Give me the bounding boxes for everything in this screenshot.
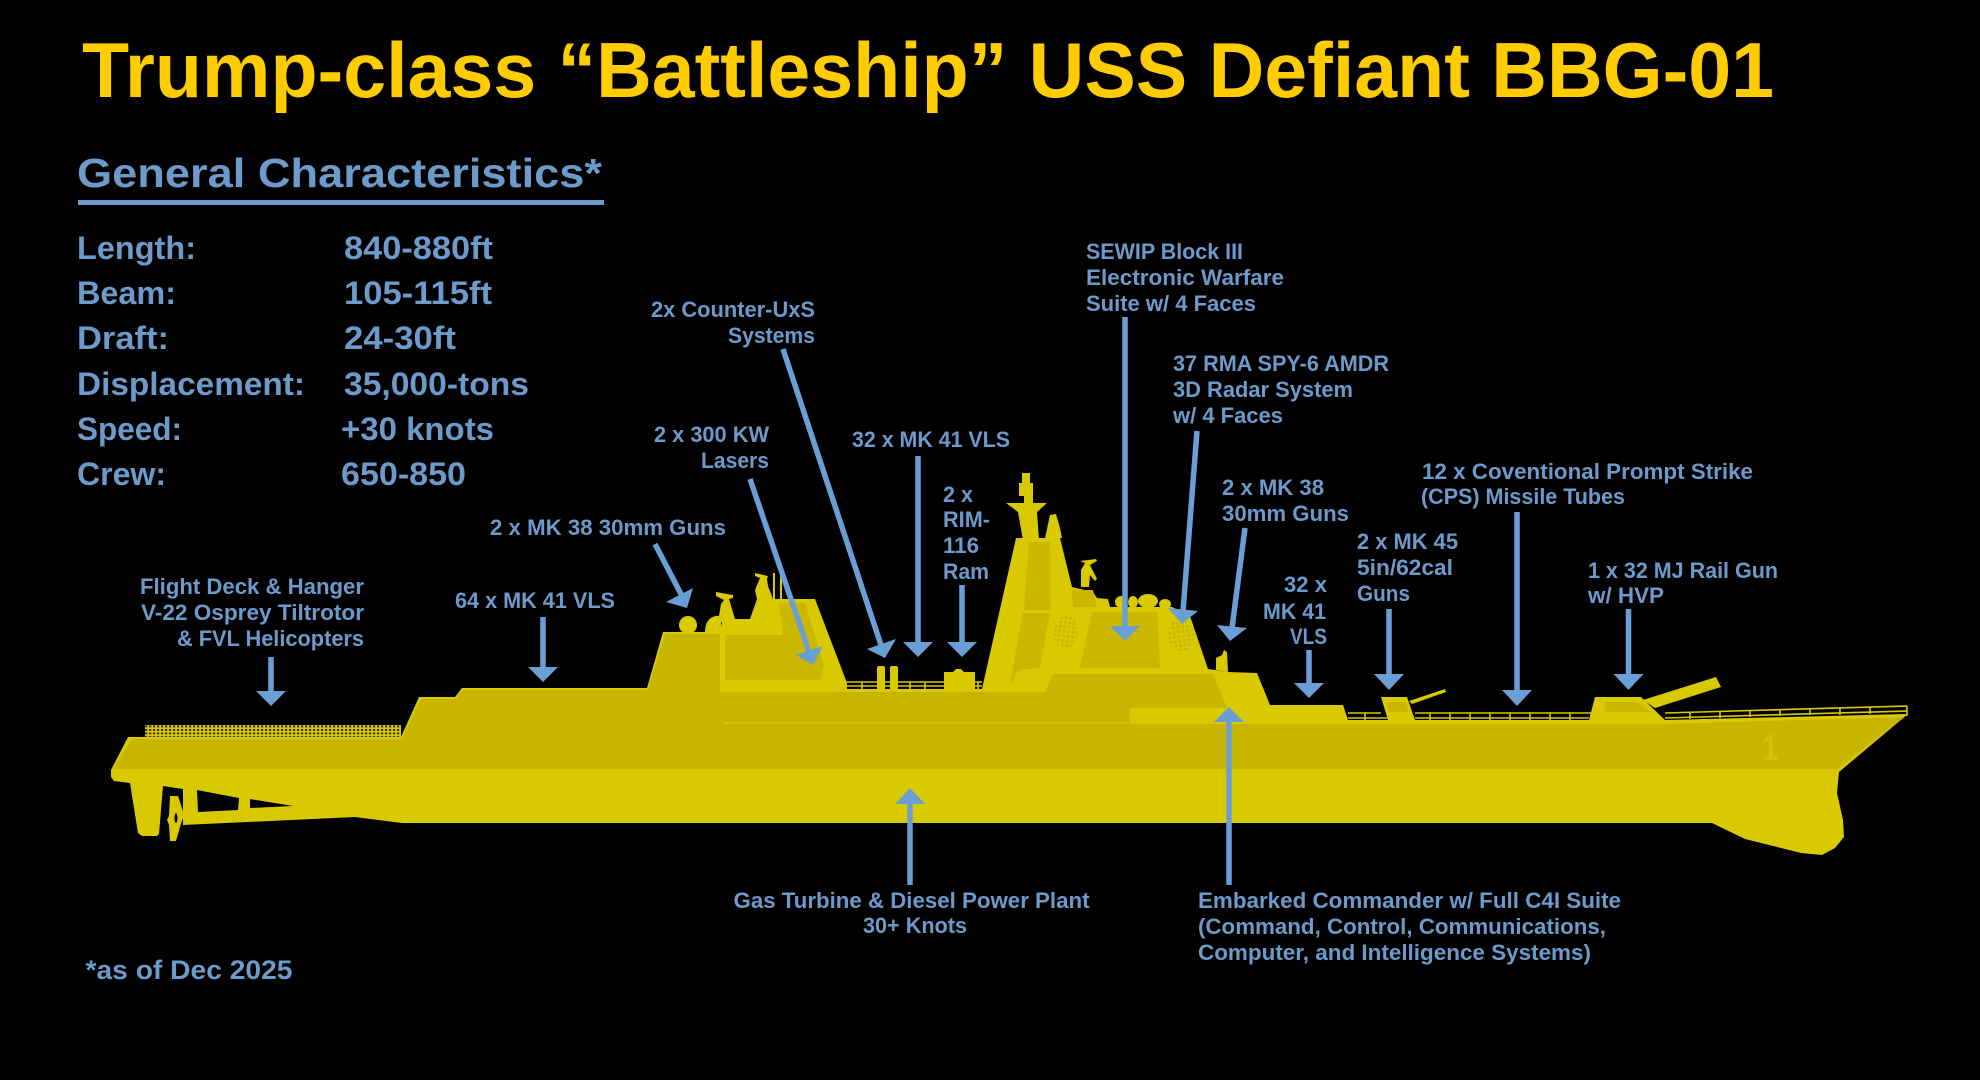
arrow: aft MK 38 guns bbox=[655, 544, 693, 608]
label: SEWIP: Electronic Warfare bbox=[1086, 265, 1284, 290]
label: forward MK 38 guns: 30mm Guns bbox=[1222, 501, 1349, 526]
arrow: RIM-116 Ram bbox=[947, 585, 977, 657]
label: lasers: Lasers bbox=[701, 448, 769, 473]
label: RIM-116 Ram bbox=[943, 482, 990, 584]
label: 32 x MK 41 VLS forward: VLS bbox=[1290, 624, 1327, 649]
label: lasers: 2 x 300 KW bbox=[654, 422, 769, 447]
railings bbox=[145, 682, 1907, 737]
arrow: counter-UxS bbox=[783, 349, 896, 658]
label: power plant bbox=[734, 888, 1090, 938]
arrow: flight deck bbox=[256, 657, 286, 706]
label: MK 45 guns: Guns bbox=[1357, 581, 1410, 606]
label: counter-UxS: Systems bbox=[728, 323, 815, 348]
stern windows bbox=[174, 790, 293, 823]
characteristics table: 24-30ft bbox=[344, 320, 456, 356]
label: 32 x MK 41 VLS forward bbox=[1263, 572, 1328, 649]
arrow: power plant bbox=[895, 788, 925, 885]
deck seam bbox=[723, 722, 1133, 724]
label: embarked commander: Computer, and Intelligence Systems) bbox=[1198, 940, 1591, 965]
arrow: 32 x MK 41 VLS forward bbox=[1294, 650, 1324, 698]
label: CPS missile tubes bbox=[1421, 459, 1753, 509]
propeller bbox=[167, 796, 184, 841]
label: rail gun: w/ HVP bbox=[1587, 583, 1664, 608]
label: forward MK 38 guns bbox=[1222, 475, 1349, 526]
gun mounts bbox=[1386, 677, 1721, 712]
hull base bbox=[111, 538, 1908, 855]
characteristics table: Draft: bbox=[77, 320, 169, 356]
arrow: lasers bbox=[750, 479, 823, 665]
aft light strip bbox=[720, 634, 725, 692]
label: 32 x MK 41 VLS midship: 32 x MK 41 VLS bbox=[852, 427, 1010, 452]
label: 64 x MK 41 VLS: 64 x MK 41 VLS bbox=[455, 588, 615, 613]
label: lasers bbox=[654, 422, 769, 473]
arrow: CPS missile tubes bbox=[1502, 512, 1532, 706]
dark hull band bbox=[113, 634, 1903, 769]
label: counter-UxS bbox=[651, 297, 815, 348]
label: CPS missile tubes: 12 x Coventional Prompt Strike bbox=[1422, 459, 1753, 484]
characteristics table: 650-850 bbox=[341, 456, 466, 492]
arrow: SPY-6 radar bbox=[1168, 431, 1198, 624]
laser mount bbox=[820, 670, 840, 682]
label: aft MK 38 guns: 2 x MK 38 30mm Guns bbox=[490, 515, 726, 540]
label: flight deck bbox=[140, 574, 364, 651]
label: RIM-116 Ram: 2 x bbox=[943, 482, 974, 507]
mast bbox=[1006, 473, 1228, 672]
label: rail gun bbox=[1587, 558, 1778, 608]
characteristics table: 105-115ft bbox=[344, 275, 492, 311]
label: SPY-6 radar: 3D Radar System bbox=[1173, 377, 1353, 402]
label: flight deck: V-22 Osprey Tiltrotor bbox=[141, 600, 364, 625]
label: 32 x MK 41 VLS forward: 32 x bbox=[1284, 572, 1328, 597]
title: Trump-class “Battleship” USS Defiant BBG-01 bbox=[82, 26, 1774, 114]
label: embarked commander: Embarked Commander w/ Full C4I Suite bbox=[1198, 888, 1621, 913]
characteristics table: Speed: bbox=[77, 411, 182, 447]
label: 32 x MK 41 VLS forward: MK 41 bbox=[1263, 599, 1326, 624]
label: power plant: Gas Turbine & Diesel Power Plant bbox=[734, 888, 1090, 913]
arrow: SEWIP bbox=[1110, 317, 1140, 641]
label: SEWIP: Suite w/ 4 Faces bbox=[1086, 291, 1256, 316]
radar faces bbox=[1052, 613, 1196, 653]
characteristics table bbox=[77, 230, 529, 492]
label: SPY-6 radar: w/ 4 Faces bbox=[1172, 403, 1283, 428]
label: embarked commander: (Command, Control, Communications, bbox=[1198, 914, 1606, 939]
arrow: MK 45 guns bbox=[1374, 609, 1404, 690]
label: rail gun: 1 x 32 MJ Rail Gun bbox=[1588, 558, 1778, 583]
label: MK 45 guns bbox=[1357, 529, 1458, 606]
characteristics table: 35,000-tons bbox=[344, 366, 529, 402]
label: MK 45 guns: 2 x MK 45 bbox=[1357, 529, 1458, 554]
label: CPS missile tubes: (CPS) Missile Tubes bbox=[1421, 484, 1625, 509]
characteristics table: Length: bbox=[77, 230, 196, 266]
label: flight deck: Flight Deck & Hanger bbox=[140, 574, 364, 599]
footnote: *as of Dec 2025 bbox=[86, 955, 292, 985]
arrow: 64 x MK 41 VLS bbox=[528, 617, 558, 682]
characteristics table: 840-880ft bbox=[344, 230, 493, 266]
label: RIM-116 Ram: RIM- bbox=[943, 507, 990, 532]
arrow: 32 x MK 41 VLS midship bbox=[903, 456, 933, 657]
label: flight deck: & FVL Helicopters bbox=[177, 626, 364, 651]
label: forward MK 38 guns: 2 x MK 38 bbox=[1222, 475, 1324, 500]
label: MK 45 guns: 5in/62cal bbox=[1357, 555, 1453, 580]
label: SPY-6 radar bbox=[1172, 351, 1389, 428]
label: counter-UxS: 2x Counter-UxS bbox=[651, 297, 815, 322]
label: SPY-6 radar: 37 RMA SPY-6 AMDR bbox=[1173, 351, 1389, 376]
label: power plant: 30+ Knots bbox=[863, 913, 967, 938]
label: RIM-116 Ram: Ram bbox=[943, 559, 989, 584]
hull number: 1 bbox=[1762, 727, 1778, 768]
arrow: embarked commander bbox=[1214, 707, 1244, 885]
aft superstructure panel bbox=[725, 603, 824, 680]
characteristics table: Beam: bbox=[77, 275, 176, 311]
ship silhouette bbox=[111, 473, 1908, 855]
label: SEWIP bbox=[1086, 239, 1284, 316]
arrow: forward MK 38 guns bbox=[1217, 528, 1247, 641]
characteristics table: Crew: bbox=[77, 456, 166, 492]
aft domes and guns bbox=[679, 573, 975, 691]
characteristics table: +30 knots bbox=[341, 411, 494, 447]
arrow: rail gun bbox=[1614, 609, 1644, 690]
label: SEWIP: SEWIP Block III bbox=[1086, 239, 1243, 264]
tower panels bbox=[1010, 542, 1160, 683]
heading: general characteristics: General Characteristics* bbox=[77, 150, 602, 196]
label: RIM-116 Ram: 116 bbox=[943, 533, 979, 558]
characteristics table: Displacement: bbox=[77, 366, 305, 402]
label: embarked commander bbox=[1198, 888, 1621, 965]
